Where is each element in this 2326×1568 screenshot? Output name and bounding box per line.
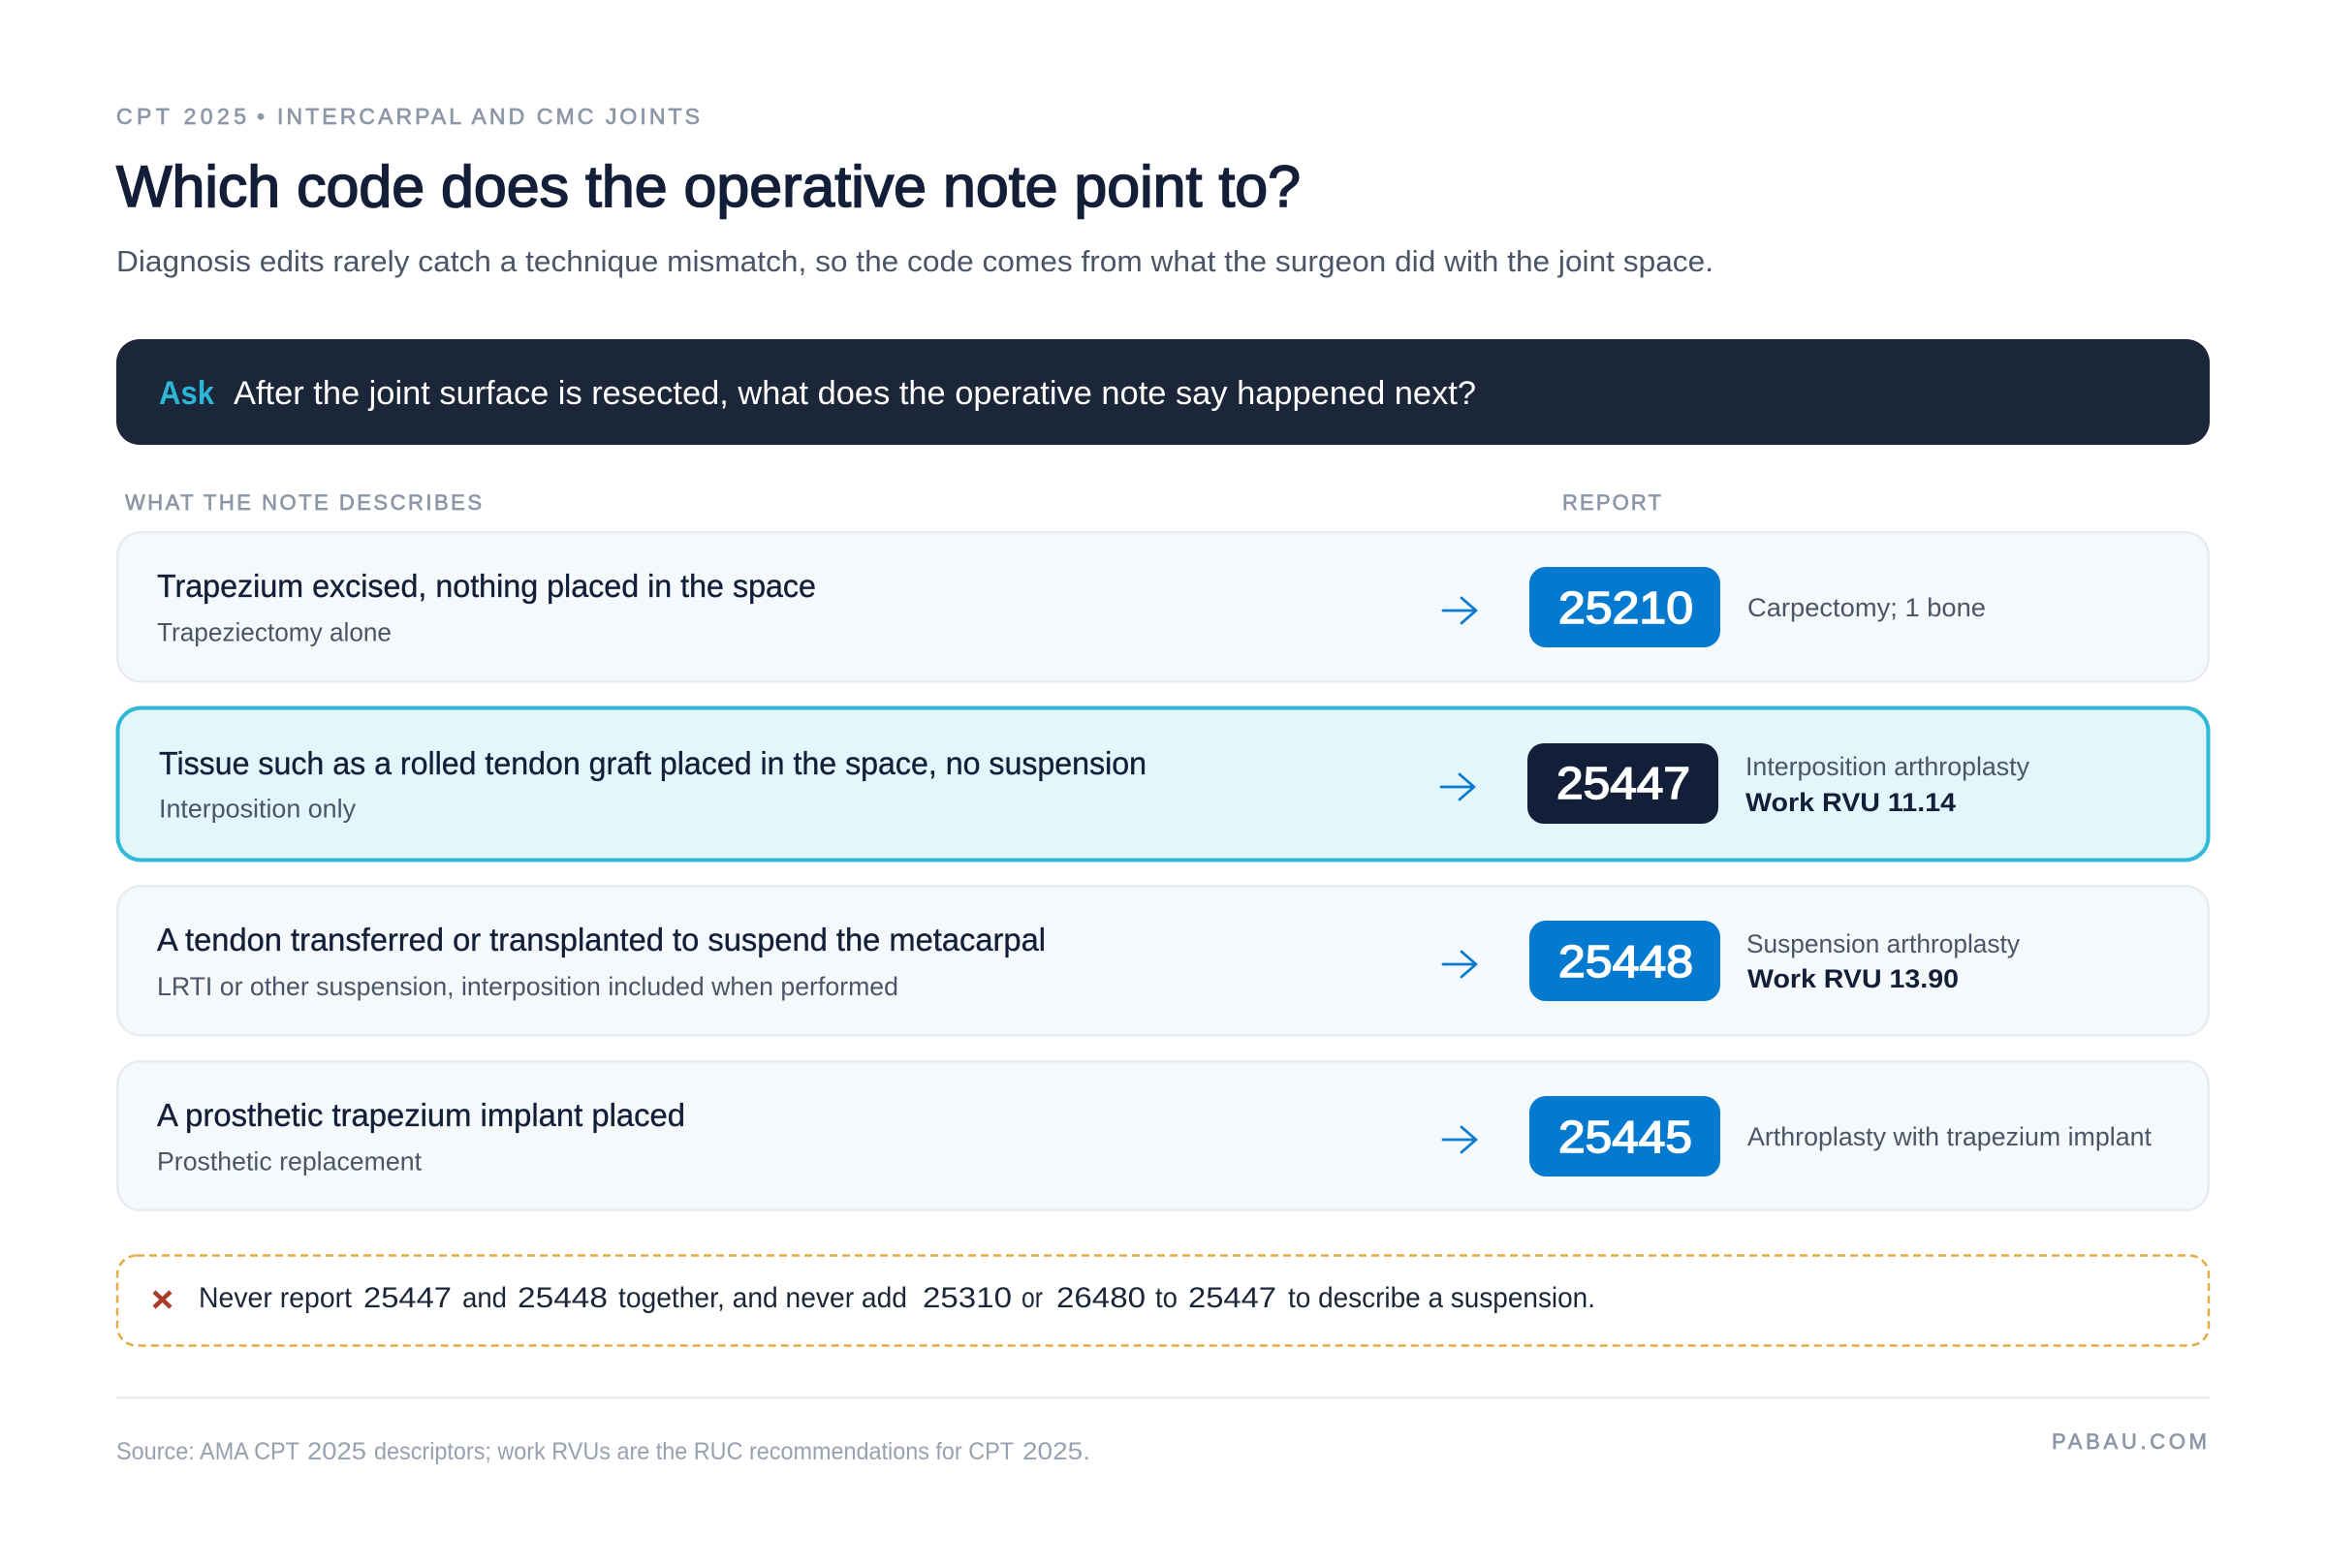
title: Which code does the operative note point to?: [116, 154, 1301, 219]
source note: descriptors; work RVUs are the RUC recommendations for CPT: [374, 1438, 1014, 1465]
code badge: [1529, 567, 1720, 647]
code label: Carpectomy; 1 bone: [1747, 593, 1986, 622]
row: 25447 highlighted: [118, 707, 2208, 861]
code badge: 25445: [1558, 1112, 1692, 1162]
warning text: 25448: [518, 1282, 608, 1314]
arrow: [1443, 1127, 1476, 1152]
source note: Source: AMA CPT: [116, 1438, 299, 1465]
code badge: 25448: [1558, 936, 1693, 987]
row title: A tendon transferred or transplanted to suspend the metacarpal: [157, 922, 1046, 957]
warning callout: [117, 1256, 2209, 1345]
code label: Interposition arthroplasty: [1745, 752, 2029, 781]
warning text: 26480: [1056, 1282, 1146, 1314]
code label: [1745, 752, 2029, 817]
source note: 2025.: [1022, 1438, 1090, 1465]
warning text: [199, 1282, 1595, 1314]
warning text: or: [1022, 1282, 1043, 1314]
arrow: [1443, 952, 1476, 977]
row: 25210: [117, 532, 2209, 681]
icon: cross: [154, 1292, 171, 1307]
source note: 2025: [307, 1438, 366, 1465]
question text: After the joint surface is resected, what does the operative note say happened next?: [234, 375, 1476, 412]
warning text: 25447: [363, 1282, 452, 1314]
brand: PABAU.COM: [2052, 1429, 2207, 1454]
arrow: [1441, 774, 1474, 800]
row title: Tissue such as a rolled tendon graft placed in the space, no suspension: [159, 745, 1147, 781]
code badge: 25210: [1558, 582, 1693, 633]
column label: note: WHAT THE NOTE DESCRIBES: [125, 490, 482, 515]
code label: Work RVU 11.14: [1745, 788, 1956, 817]
warning text: and: [462, 1282, 507, 1314]
warning text: Never report: [199, 1282, 353, 1314]
code label: Arthroplasty with trapezium implant: [1747, 1122, 2152, 1151]
eyebrow: CPT 2025: [116, 104, 246, 129]
code badge: [1527, 743, 1718, 824]
eyebrow: INTERCARPAL AND CMC JOINTS: [277, 104, 700, 129]
row detail: Interposition only: [159, 795, 356, 824]
row title: A prosthetic trapezium implant placed: [157, 1097, 685, 1133]
code label: Work RVU 13.90: [1747, 964, 1959, 993]
row: 25445: [117, 1061, 2209, 1210]
ask label: Ask: [159, 375, 214, 412]
code label: Suspension arthroplasty: [1746, 929, 2020, 958]
question banner: [116, 339, 2210, 445]
warning text: 25447: [1188, 1282, 1276, 1314]
row title: Trapezium excised, nothing placed in the space: [157, 568, 816, 604]
code label: [1746, 929, 2020, 993]
row: 25448: [117, 886, 2209, 1035]
warning text: together, and never add: [618, 1282, 907, 1314]
subtitle: Diagnosis edits rarely catch a technique mismatch, so the code comes from what the surgeon did with the joint space.: [116, 244, 1713, 278]
code badge: [1529, 1096, 1720, 1176]
eyebrow: •: [257, 104, 265, 129]
row detail: Trapeziectomy alone: [157, 618, 392, 647]
warning text: to: [1155, 1282, 1178, 1314]
code badge: [1529, 921, 1720, 1001]
row detail: Prosthetic replacement: [157, 1147, 422, 1176]
warning text: to describe a suspension.: [1288, 1282, 1595, 1314]
row detail: LRTI or other suspension, interposition included when performed: [157, 972, 898, 1001]
warning text: 25310: [923, 1282, 1012, 1314]
arrow: [1443, 598, 1476, 623]
code badge: 25447: [1556, 758, 1690, 808]
column label: report: REPORT: [1562, 490, 1661, 515]
